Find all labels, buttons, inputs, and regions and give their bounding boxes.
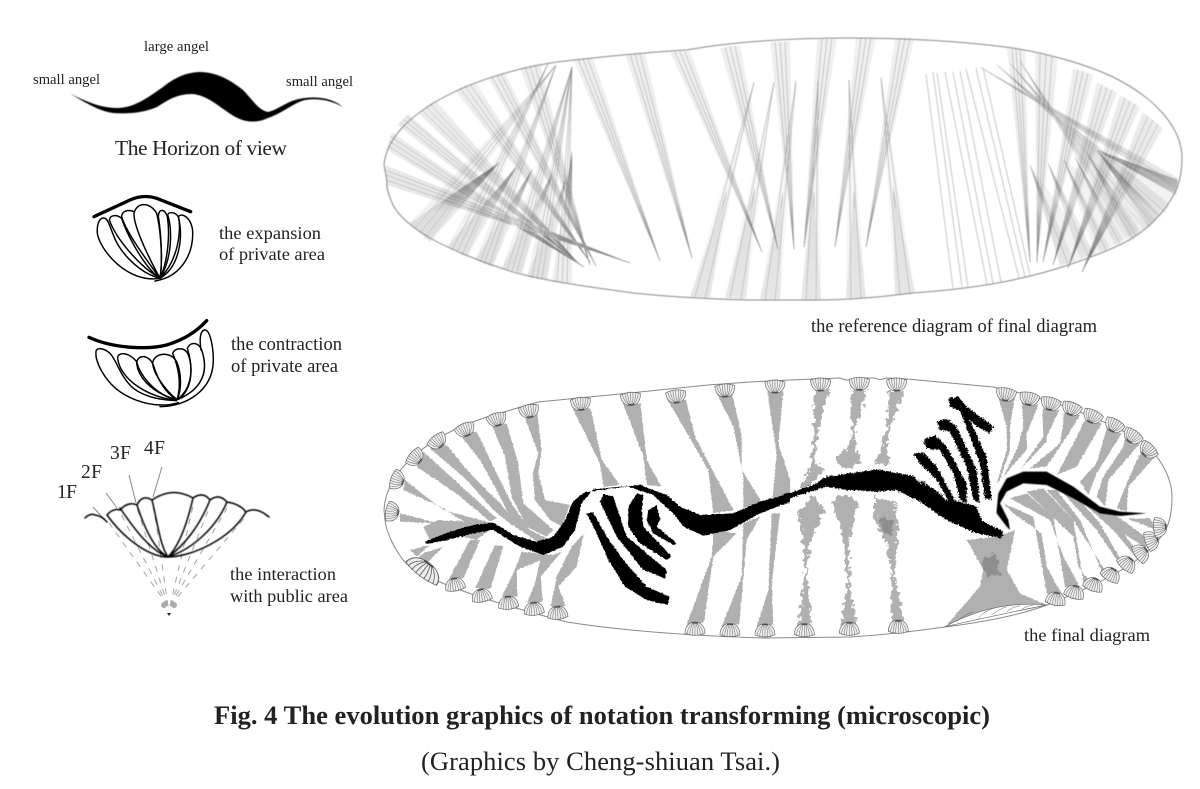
grey wedges: centre columns	[780, 390, 905, 627]
chart: reference diagram of final diagram	[384, 38, 1182, 300]
icon: contraction shell	[89, 321, 213, 407]
upward fans	[690, 78, 915, 300]
chart: final diagram	[383, 377, 1172, 638]
black horizon: left half	[425, 485, 790, 605]
text: the expansion of private area: of private area	[219, 244, 325, 264]
icon: viewer point	[161, 602, 177, 616]
black hook	[997, 472, 1147, 530]
icon: interaction shell	[85, 492, 269, 557]
dark speckle patches	[880, 517, 1000, 577]
grey wedges: right half	[947, 392, 1157, 625]
floor labels: 1F	[57, 482, 77, 503]
caption: the horizon of view: The Horizon of view	[115, 136, 288, 160]
text: the interaction with public area: the interaction	[230, 564, 336, 584]
panel: the expansion of private area	[94, 197, 325, 281]
left cluster: downward fans	[385, 63, 630, 267]
right cluster: converging fans	[980, 61, 1178, 266]
icon: horizon wave	[69, 72, 343, 122]
shells: left part	[383, 379, 785, 638]
text: the interaction with public area: with public area	[230, 586, 348, 606]
shells: right part	[794, 377, 1168, 637]
figure credit: (Graphics by Cheng-shiuan Tsai.)	[421, 746, 780, 776]
icon: expansion shell	[94, 197, 193, 281]
label: small angel right: small angel	[286, 74, 353, 90]
outline of final diagram	[384, 378, 1172, 638]
grey wedges: left half	[400, 392, 790, 627]
floor labels: 2F	[81, 462, 102, 483]
floor labels: 4F	[144, 438, 165, 459]
text: the interaction with public area	[230, 564, 348, 606]
panel: the interaction with public area	[57, 438, 348, 616]
sparse thin lines	[926, 68, 1030, 288]
floor labels: 3F	[110, 443, 131, 464]
text: the expansion of private area	[219, 223, 325, 264]
panel: the contraction of private area	[89, 321, 342, 407]
downward fans	[573, 38, 914, 261]
left cluster: upward fans	[410, 64, 572, 283]
label: small angel left: small angel	[33, 72, 100, 88]
panel: horizon of view	[33, 39, 353, 160]
text: the contraction of private area: the contraction	[231, 335, 342, 355]
sight lines	[107, 506, 246, 606]
caption: reference diagram: the reference diagram of final diagram	[811, 317, 1098, 337]
right cluster: downward fans	[1007, 48, 1163, 272]
label: large angel: large angel	[144, 39, 209, 55]
text: the contraction of private area	[231, 335, 342, 377]
floor leader lines	[93, 467, 162, 520]
figure title: Fig. 4 The evolution graphics of notation transforming (microscopic)	[214, 700, 990, 730]
text: the expansion of private area: the expansion	[219, 223, 321, 243]
caption: the final diagram: the final diagram	[1024, 625, 1151, 645]
black horizon: right half	[780, 397, 1003, 538]
floor labels	[57, 438, 165, 503]
outline of reference ellipse	[384, 38, 1182, 300]
text: the contraction of private area: of private area	[231, 357, 338, 377]
